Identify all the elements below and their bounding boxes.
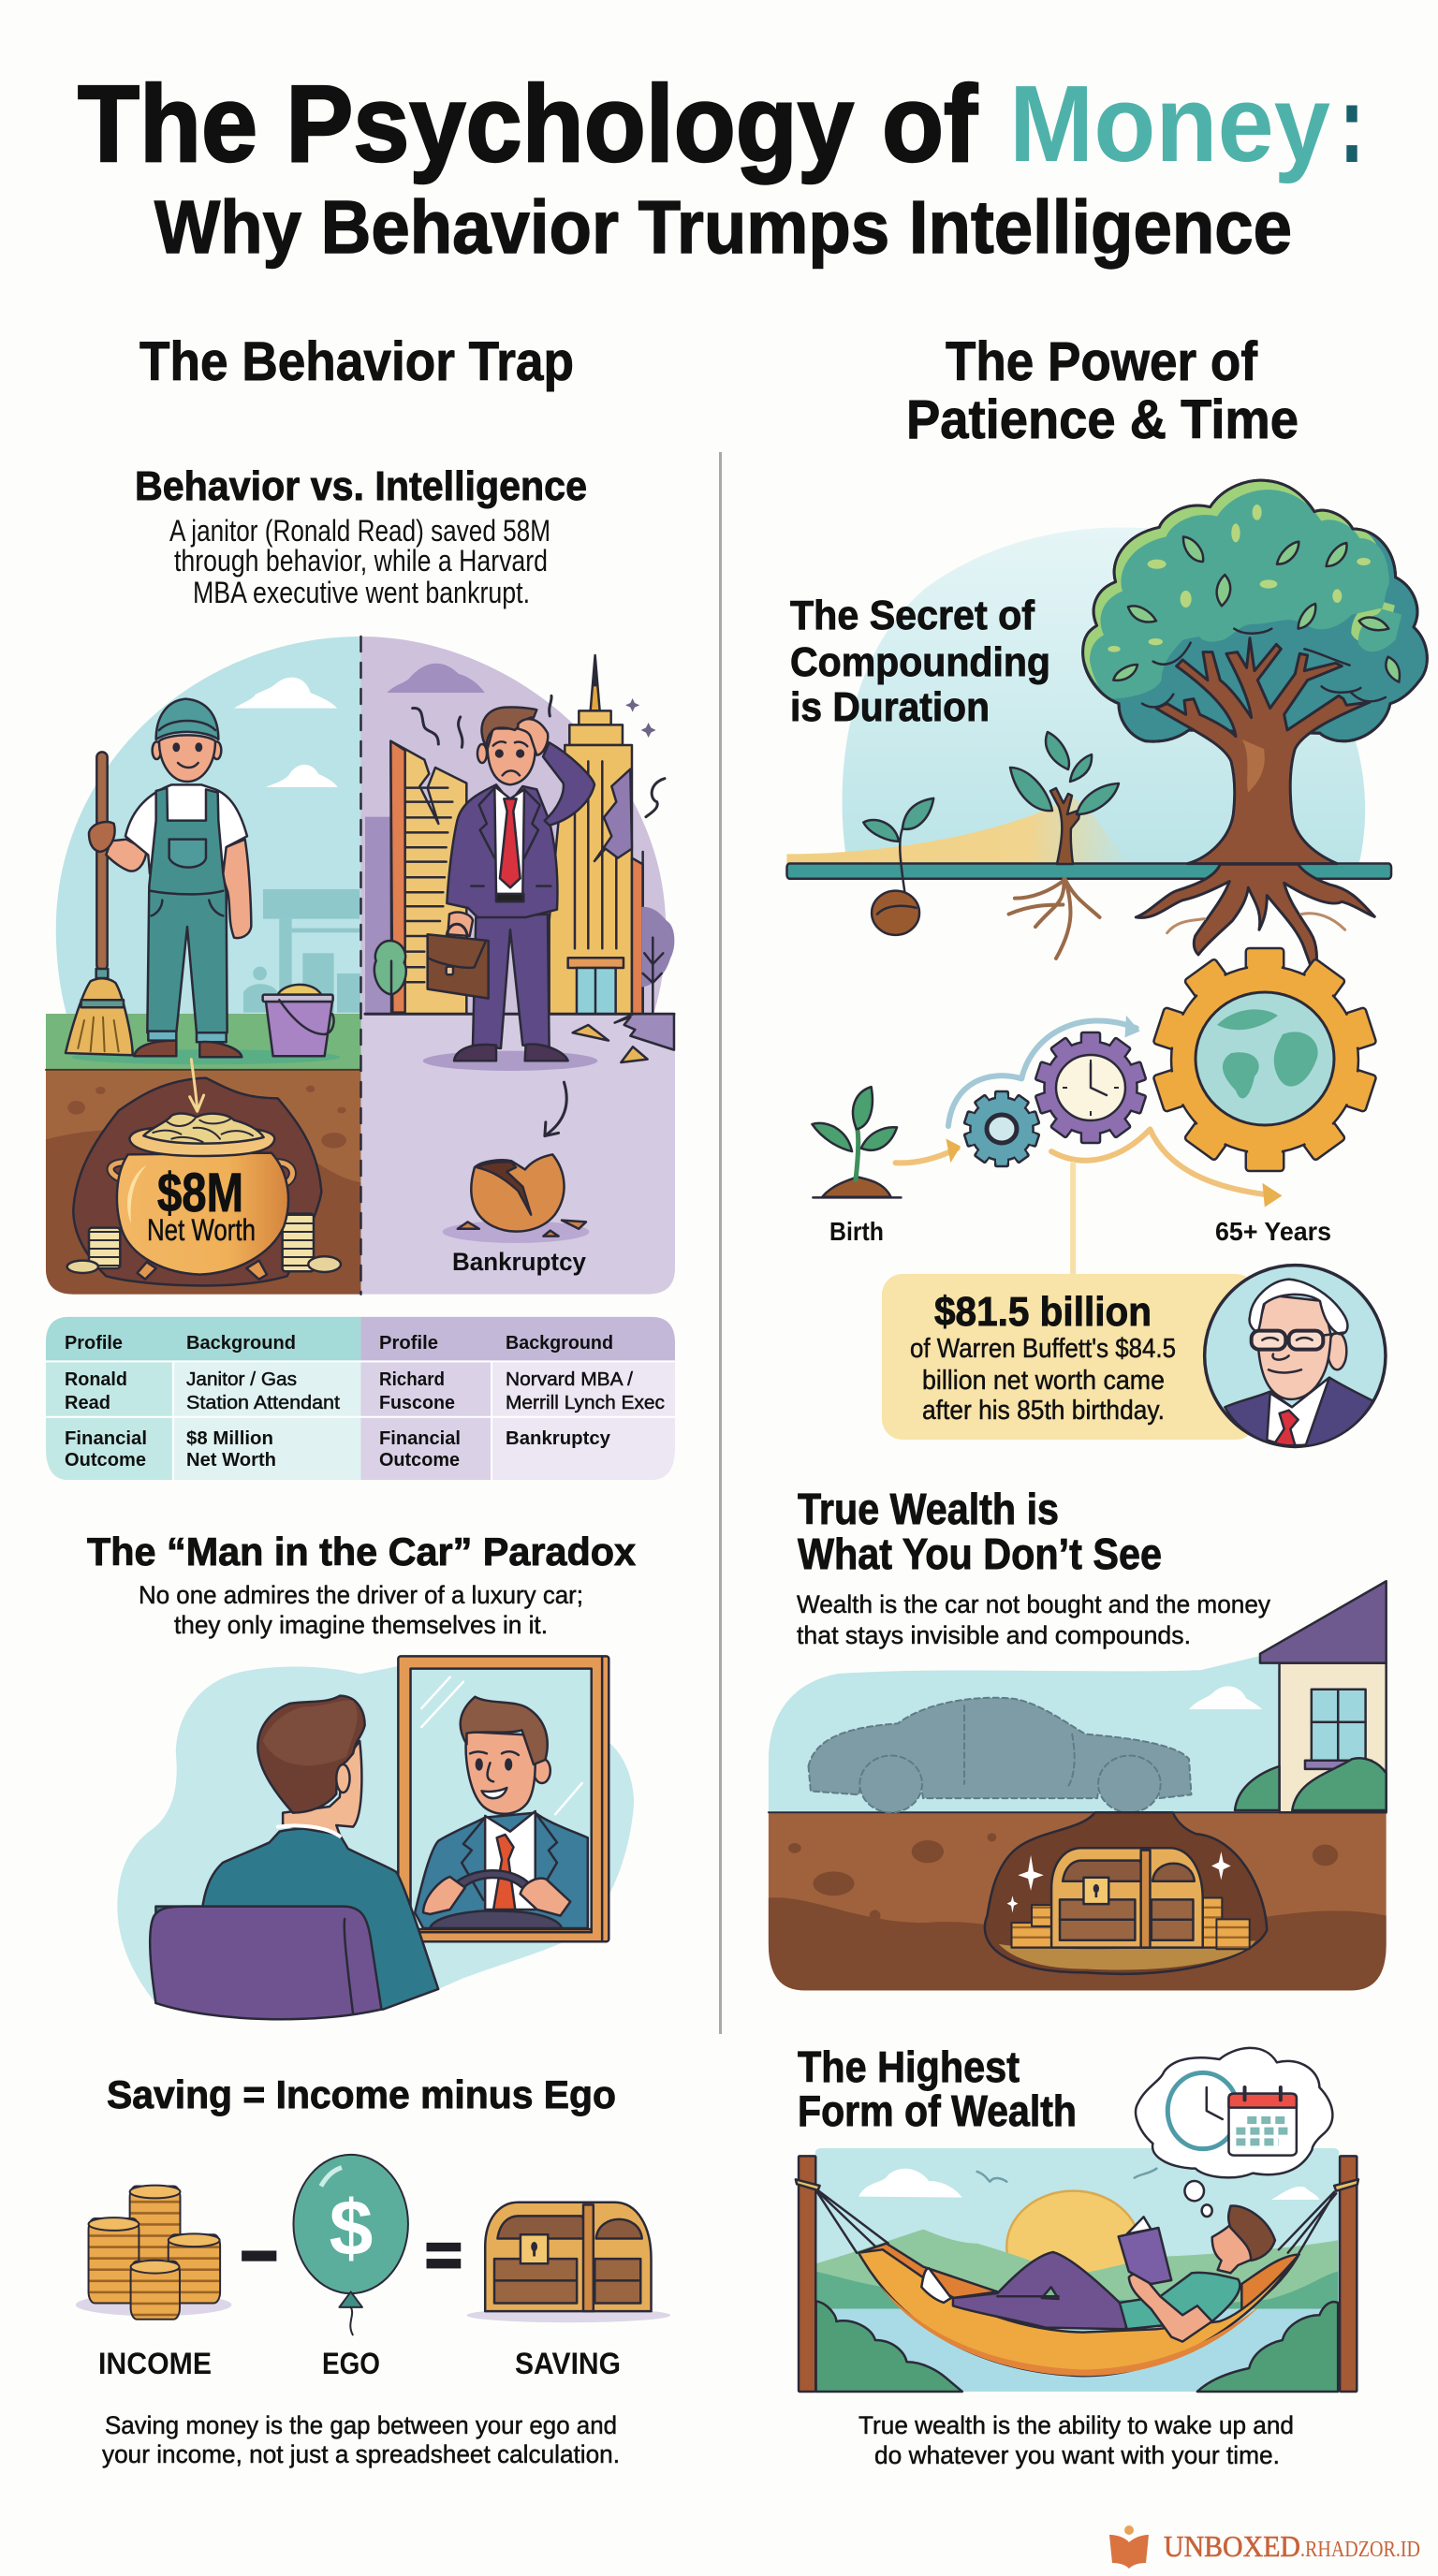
car seat	[150, 1907, 381, 2019]
text: saving explanation: your income, not just a spreadsheet calculation.	[102, 2440, 620, 2468]
pot label: $8M Net Worth	[147, 1163, 256, 1247]
heading: The Secret of Compounding is Duration: Compounding	[790, 639, 1050, 685]
executive scene	[365, 655, 674, 1071]
text: janitor versus MBA summary: through behavior, while a Harvard	[174, 544, 548, 578]
title: The Psychology of	[78, 63, 977, 184]
illustration: hammock scene with thought bubble	[796, 2048, 1358, 2392]
cracked tower	[550, 655, 643, 1014]
heading: True Wealth is What You Don't See: True Wealth is	[798, 1485, 1059, 1533]
clouds	[234, 678, 338, 787]
purple tree	[643, 908, 673, 1014]
text: wealth is the car not bought	[797, 1590, 1270, 1649]
comparison table: Bankruptcy	[506, 1428, 611, 1449]
text: janitor versus MBA summary: MBA executive went bankrupt.	[193, 576, 530, 609]
equation: income minus ego equals saving: SAVING	[515, 2347, 621, 2380]
equation: income minus ego equals saving: INCOME	[98, 2347, 212, 2380]
ghost car	[809, 1698, 1191, 1812]
illustration: ghost car and buried treasure	[769, 1581, 1387, 1990]
pot handles and feet	[110, 1163, 292, 1280]
text: saving explanation	[102, 2411, 620, 2468]
callout: Warren Buffett	[882, 1266, 1386, 1447]
text: wealth is the car not bought: Wealth is the car not bought and the money	[797, 1590, 1270, 1618]
heading: Saving = Income minus Ego: Saving = Income minus Ego	[107, 2072, 616, 2116]
comparison table: Profile	[65, 1333, 123, 1354]
arrow and broken egg	[360, 637, 589, 1295]
callout: Warren Buffett: billion net worth came	[922, 1366, 1165, 1396]
comparison table: Norvard MBA /	[506, 1369, 633, 1390]
mirror frame	[398, 1656, 609, 1941]
callout: Warren Buffett: $81.5 billion	[934, 1289, 1152, 1335]
text: man in the car explanation	[139, 1581, 583, 1639]
heading: True Wealth is What You Don't See: What You Don’t See	[798, 1530, 1162, 1578]
title: Why Behavior Trumps Intelligence	[154, 185, 1292, 269]
icon: ego balloon	[293, 2155, 408, 2335]
comparison table: Background	[506, 1333, 613, 1354]
gas station silhouette	[243, 889, 360, 1013]
text: wealth is the car not bought: that stays invisible and compounds.	[797, 1621, 1191, 1649]
text: janitor versus MBA summary: A janitor (Ronald Read) saved 58M	[169, 514, 550, 548]
treasure cave	[985, 1812, 1267, 1974]
icon: treasure chest	[467, 2203, 670, 2322]
janitor	[89, 699, 251, 1057]
title: Money	[1009, 63, 1330, 184]
text: true wealth caption	[858, 2411, 1294, 2469]
hammock	[858, 2244, 1299, 2376]
heading: The Power of Patience & Time	[906, 331, 1299, 450]
title: :	[1341, 63, 1363, 184]
heading: The Secret of Compounding is Duration: The Secret of	[790, 593, 1034, 638]
label: Bankruptcy: Bankruptcy	[452, 1248, 586, 1276]
comparison table: Outcome	[379, 1450, 460, 1471]
callout: Warren Buffett: of Warren Buffett's $84.5	[910, 1334, 1176, 1364]
bankrupt executive	[428, 708, 594, 1061]
heading: The Man in the Car Paradox: The “Man in the Car” Paradox	[87, 1530, 637, 1573]
coin stacks	[67, 1214, 341, 1273]
equation: income minus ego equals saving	[76, 2155, 670, 2380]
comparison table: Fuscone	[379, 1393, 455, 1413]
comparison table: Net Worth	[186, 1450, 276, 1471]
comparison table: Richard	[379, 1369, 445, 1390]
stress marks and sparkles	[413, 695, 665, 817]
comparison table: Profile	[379, 1333, 438, 1354]
sapling	[1010, 732, 1119, 864]
heading: The Highest Form of Wealth	[798, 2042, 1077, 2135]
janitor scene	[66, 678, 360, 1064]
hammock ropes and posts	[796, 2156, 1358, 2392]
comparison table: Janitor / Gas	[186, 1369, 297, 1390]
icon: coin stacks	[76, 2186, 231, 2320]
text: janitor versus MBA summary	[169, 514, 550, 609]
comparison table: Merrill Lynch Exec	[506, 1393, 665, 1413]
pot label: $8M Net Worth: $8M	[157, 1163, 243, 1223]
thought bubble	[1136, 2048, 1332, 2217]
text: true wealth caption: do whatever you want with your time.	[874, 2441, 1280, 2469]
house	[1235, 1581, 1387, 1812]
comparison table: $8 Million	[186, 1428, 273, 1449]
cloud	[1189, 1686, 1262, 1709]
illustration: seed to tree growth	[786, 480, 1427, 977]
comparison table: Financial	[379, 1428, 461, 1449]
icon: birth sprout	[812, 1087, 901, 1197]
arrow to pot	[190, 1060, 204, 1111]
arrows	[896, 1020, 1276, 1275]
heading: The Power of Patience & Time: The Power of	[946, 331, 1258, 392]
icon: small gear	[964, 1091, 1039, 1166]
reclining person with book	[921, 2206, 1275, 2342]
text: man in the car explanation: they only imagine themselves in it.	[174, 1611, 548, 1639]
tree	[1083, 480, 1427, 977]
pot label: $8M Net Worth: Net Worth	[147, 1213, 256, 1247]
heading: The Highest Form of Wealth: Form of Wealth	[798, 2086, 1077, 2135]
gold pot	[117, 1113, 288, 1275]
comparison table: Financial	[65, 1428, 147, 1449]
heading: The Secret of Compounding is Duration: is Duration	[790, 684, 990, 730]
man seen from behind	[155, 1696, 438, 2010]
heading: The Behavior Trap: The Behavior Trap	[139, 331, 574, 392]
title	[78, 63, 1363, 269]
seedling	[863, 798, 933, 935]
illustration: man looking in mirror	[117, 1656, 634, 2019]
icon: globe gear	[1153, 948, 1376, 1171]
icon: clock gear	[1035, 1032, 1146, 1143]
heading: True Wealth is What You Don't See	[798, 1485, 1162, 1578]
timeline: birth to 65 plus years: Birth	[829, 1217, 884, 1246]
left tree	[374, 941, 406, 1014]
timeline: birth to 65 plus years	[812, 948, 1376, 1275]
comparison table: Outcome	[65, 1450, 146, 1471]
timeline: birth to 65 plus years: 65+ Years	[1215, 1217, 1331, 1246]
panel: janitor versus executive illustration	[46, 637, 675, 1295]
heading: The Power of Patience & Time: Patience & Time	[906, 389, 1299, 450]
sapling roots	[1009, 879, 1100, 959]
bucket	[263, 985, 334, 1056]
text: saving explanation: Saving money is the gap between your ego and	[105, 2411, 617, 2439]
heading: Behavior vs. Intelligence: Behavior vs. Intelligence	[135, 463, 587, 509]
equation: income minus ego equals saving: EGO	[322, 2347, 380, 2380]
smiling man in mirror	[411, 1697, 592, 1932]
portrait: Warren Buffett	[1205, 1266, 1386, 1447]
comparison table: Background	[186, 1333, 296, 1354]
text: man in the car explanation: No one admires the driver of a luxury car;	[139, 1581, 583, 1609]
callout: Warren Buffett: after his 85th birthday.	[922, 1396, 1165, 1426]
treasure pot scene	[67, 1060, 346, 1285]
heading: The Secret of Compounding is Duration	[790, 593, 1050, 730]
broom	[66, 752, 133, 1055]
comparison table: Station Attendant	[186, 1393, 340, 1413]
cracked left building	[390, 741, 466, 1014]
heading: The Highest Form of Wealth: The Highest	[798, 2042, 1020, 2091]
comparison table	[46, 1317, 675, 1480]
comparison table: Ronald	[65, 1369, 127, 1390]
text: true wealth caption: True wealth is the ability to wake up and	[858, 2411, 1294, 2439]
equation: income minus ego equals saving: $	[330, 2184, 373, 2272]
logo: UNBOXED.RHADZOR.ID	[1109, 2525, 1420, 2569]
logo: UNBOXED.RHADZOR.ID: UNBOXED	[1164, 2529, 1300, 2563]
comparison table: Read	[65, 1393, 110, 1413]
